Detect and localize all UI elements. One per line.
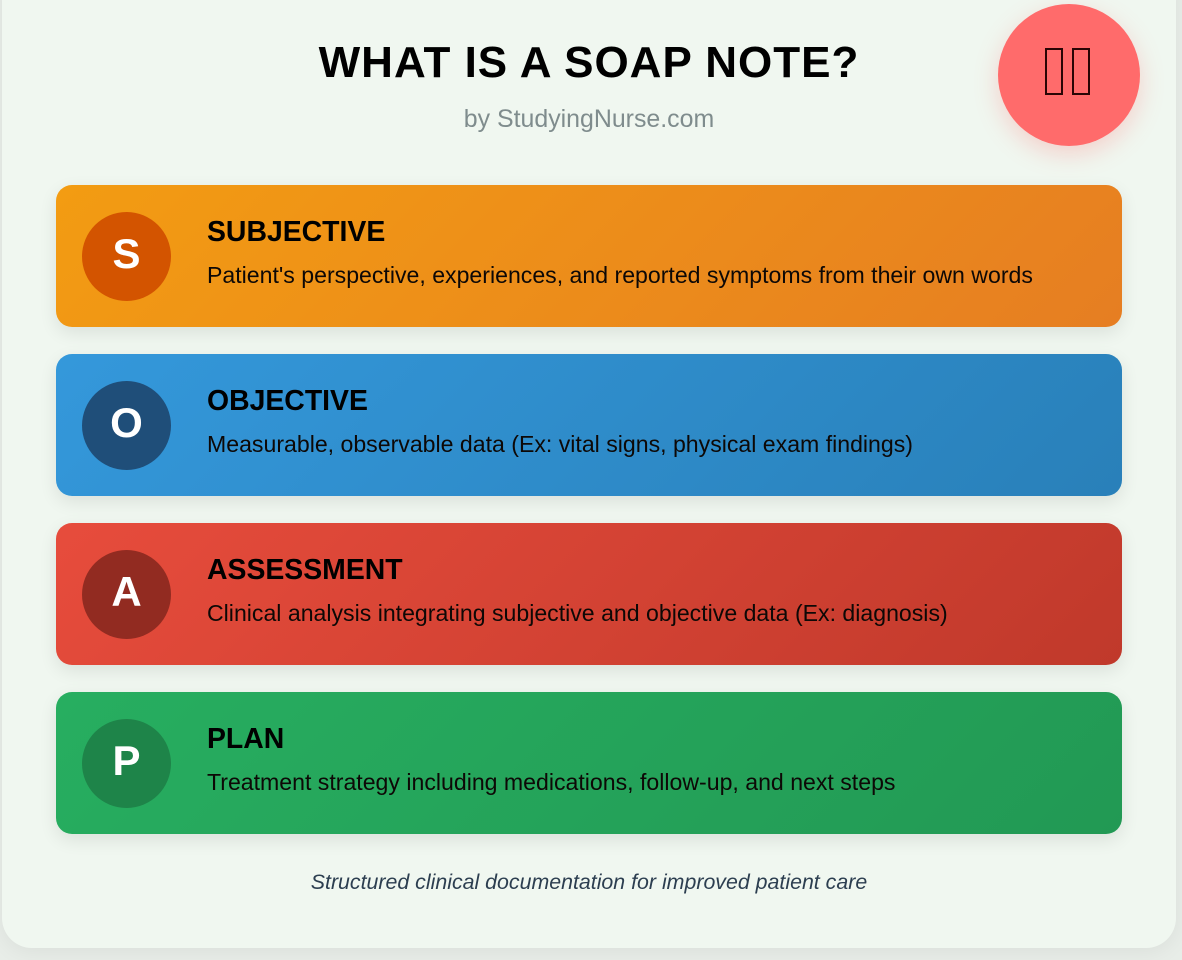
letter circle P bbox=[82, 719, 171, 808]
icon: red circle badge with missing-glyph boxes bbox=[998, 4, 1140, 146]
heading: subjective: SUBJECTIVE bbox=[207, 216, 385, 248]
description: subjective: Patient's perspective, experiences, and reported symptoms from their own words bbox=[207, 262, 1033, 288]
panel: subjective bbox=[56, 185, 1122, 327]
letter circle O: O bbox=[110, 399, 143, 446]
letter circle A: A bbox=[111, 568, 142, 615]
letter circle S: S bbox=[112, 230, 140, 277]
panel: assessment bbox=[56, 523, 1122, 665]
heading: assessment: ASSESSMENT bbox=[207, 554, 403, 586]
letter circle S bbox=[82, 212, 171, 301]
description: objective: Measurable, observable data (Ex: vital signs, physical exam findings) bbox=[207, 431, 913, 457]
panel: objective bbox=[56, 354, 1122, 496]
footer tagline: Structured clinical documentation for improved patient care bbox=[311, 870, 867, 894]
description: assessment: Clinical analysis integrating subjective and objective data (Ex: diagnosis) bbox=[207, 600, 948, 626]
subtitle: by StudyingNurse.com bbox=[464, 105, 714, 133]
letter circle A bbox=[82, 550, 171, 639]
letter circle P: P bbox=[112, 737, 140, 784]
letter circle O bbox=[82, 381, 171, 470]
title: WHAT IS A SOAP NOTE? bbox=[319, 38, 859, 87]
description: plan: Treatment strategy including medications, follow-up, and next steps bbox=[207, 769, 895, 795]
heading: plan: PLAN bbox=[207, 723, 284, 755]
panel: plan bbox=[56, 692, 1122, 834]
heading: objective: OBJECTIVE bbox=[207, 385, 368, 417]
